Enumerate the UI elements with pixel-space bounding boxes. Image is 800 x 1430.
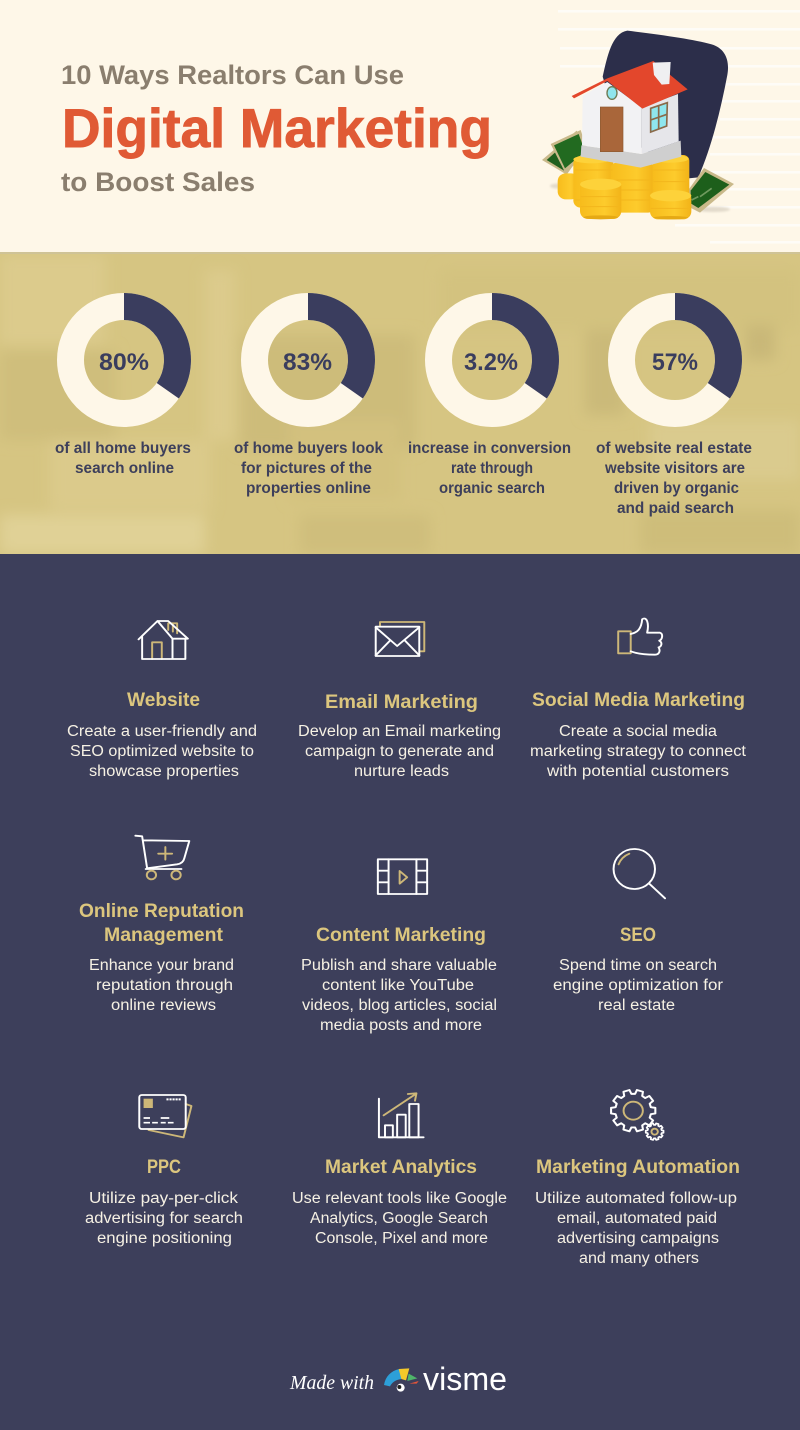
way: Marketing Automation (535, 1090, 740, 1267)
ways panel background (0, 554, 800, 1430)
caption: rate through (451, 460, 533, 477)
description: SEO optimized website to (70, 743, 254, 760)
description: nurture leads (354, 763, 449, 780)
description: engine optimization for (553, 977, 723, 994)
heading: Website (127, 689, 200, 711)
description: advertising campaigns (557, 1230, 719, 1247)
window (651, 103, 667, 132)
heading: Content Marketing (316, 924, 486, 946)
description (89, 957, 234, 1014)
caption: properties online (246, 480, 371, 497)
description: real estate (598, 997, 675, 1014)
description: Analytics, Google Search (310, 1210, 488, 1227)
description: Create a social media (559, 723, 717, 740)
description (553, 957, 723, 1014)
description: Utilize automated follow-up (535, 1190, 737, 1207)
dark rounded backdrop (603, 31, 728, 178)
donut chart (622, 306, 728, 414)
description: advertising for search (85, 1210, 243, 1227)
description: campaign to generate and (305, 743, 494, 760)
caption: of all home buyers (55, 440, 191, 457)
caption: organic search (439, 480, 545, 497)
icon: magnifying glass (614, 849, 665, 898)
heading: Social Media Marketing (532, 689, 745, 711)
caption (234, 440, 383, 497)
donut chart (438, 306, 546, 414)
description (67, 723, 257, 780)
icon: thumbs up (618, 619, 662, 655)
caption: increase in conversion (408, 440, 571, 457)
description (535, 1190, 737, 1267)
heading: PPC (147, 1156, 181, 1178)
value: 3.2% (464, 349, 518, 376)
stat 4 (596, 306, 752, 517)
heading: SEO (620, 924, 656, 946)
icon: house (139, 621, 188, 659)
round window (607, 87, 617, 99)
description: showcase properties (89, 763, 239, 780)
way: Email Marketing (298, 622, 501, 780)
roof (572, 61, 688, 109)
door (600, 107, 623, 152)
description (85, 1190, 243, 1247)
description: marketing strategy to connect (530, 743, 747, 760)
description (530, 723, 747, 780)
description: online reviews (111, 997, 216, 1014)
money left (542, 130, 588, 175)
way: SEO (553, 849, 723, 1014)
title line 2: Digital Marketing (62, 97, 492, 159)
header panel (0, 0, 800, 252)
heading (79, 900, 244, 946)
description: Develop an Email marketing (298, 723, 501, 740)
title line 1: 10 Ways Realtors Can Use (61, 60, 404, 90)
description: videos, blog articles, social (302, 997, 497, 1014)
icon: film strip (378, 859, 427, 894)
icon: envelope (376, 622, 424, 656)
way: PPC (85, 1095, 243, 1247)
chimney (653, 62, 671, 85)
heading: Email Marketing (325, 691, 478, 713)
caption: and paid search (617, 500, 734, 517)
caption: website visitors are (604, 460, 745, 477)
way: Market Analytics (292, 1093, 507, 1247)
description: media posts and more (320, 1017, 482, 1034)
caption (55, 440, 191, 477)
icon: shopping cart (135, 836, 189, 879)
stat 2 (234, 306, 383, 497)
house walls (582, 82, 642, 154)
icon: visme logo (384, 1368, 419, 1392)
caption (408, 440, 571, 497)
description: Create a user-friendly and (67, 723, 257, 740)
caption: for pictures of the (241, 460, 372, 477)
caption: of home buyers look (234, 440, 383, 457)
illustration: house on coins (542, 31, 734, 219)
description: Console, Pixel and more (315, 1230, 488, 1247)
value: 80% (99, 349, 149, 376)
description: email, automated paid (557, 1210, 717, 1227)
way: Online Reputation Management (79, 836, 244, 1014)
description: content like YouTube (322, 977, 474, 994)
description: with potential customers (546, 763, 729, 780)
heading: Online Reputation (79, 900, 244, 922)
description: Spend time on search (559, 957, 717, 974)
icon: credit cards (139, 1095, 191, 1137)
stats panel background photo (0, 252, 800, 554)
value: 83% (283, 349, 332, 376)
coins (558, 155, 691, 219)
description (298, 723, 501, 780)
footer: made with visme (289, 1361, 507, 1397)
made with text: Made with (289, 1372, 374, 1394)
description: Enhance your brand (89, 957, 234, 974)
money right (688, 168, 734, 213)
description: Publish and share valuable (301, 957, 497, 974)
visme wordmark: visme (423, 1361, 507, 1397)
house foundation (581, 141, 681, 168)
value: 57% (652, 349, 698, 376)
way: Social Media Marketing (530, 619, 747, 780)
icon: gears (611, 1090, 663, 1140)
donut chart (254, 306, 362, 414)
description: Use relevant tools like Google (292, 1190, 507, 1207)
way: Content Marketing (301, 859, 497, 1034)
caption: search online (75, 460, 174, 477)
stat 3 (408, 306, 571, 497)
icon: growth chart (379, 1093, 424, 1137)
description (301, 957, 497, 1034)
description: and many others (579, 1250, 699, 1267)
caption: driven by organic (614, 480, 739, 497)
stat 1 (55, 306, 191, 477)
description: reputation through (96, 977, 233, 994)
heading: Management (104, 924, 223, 946)
donut chart (70, 306, 178, 414)
way: Website (67, 621, 257, 780)
title line 3: to Boost Sales (61, 167, 255, 197)
description: engine positioning (97, 1230, 232, 1247)
heading: Market Analytics (325, 1156, 477, 1178)
caption (596, 440, 752, 517)
description: Utilize pay-per-click (89, 1190, 238, 1207)
description (292, 1190, 507, 1247)
heading: Marketing Automation (536, 1156, 740, 1178)
caption: of website real estate (596, 440, 752, 457)
